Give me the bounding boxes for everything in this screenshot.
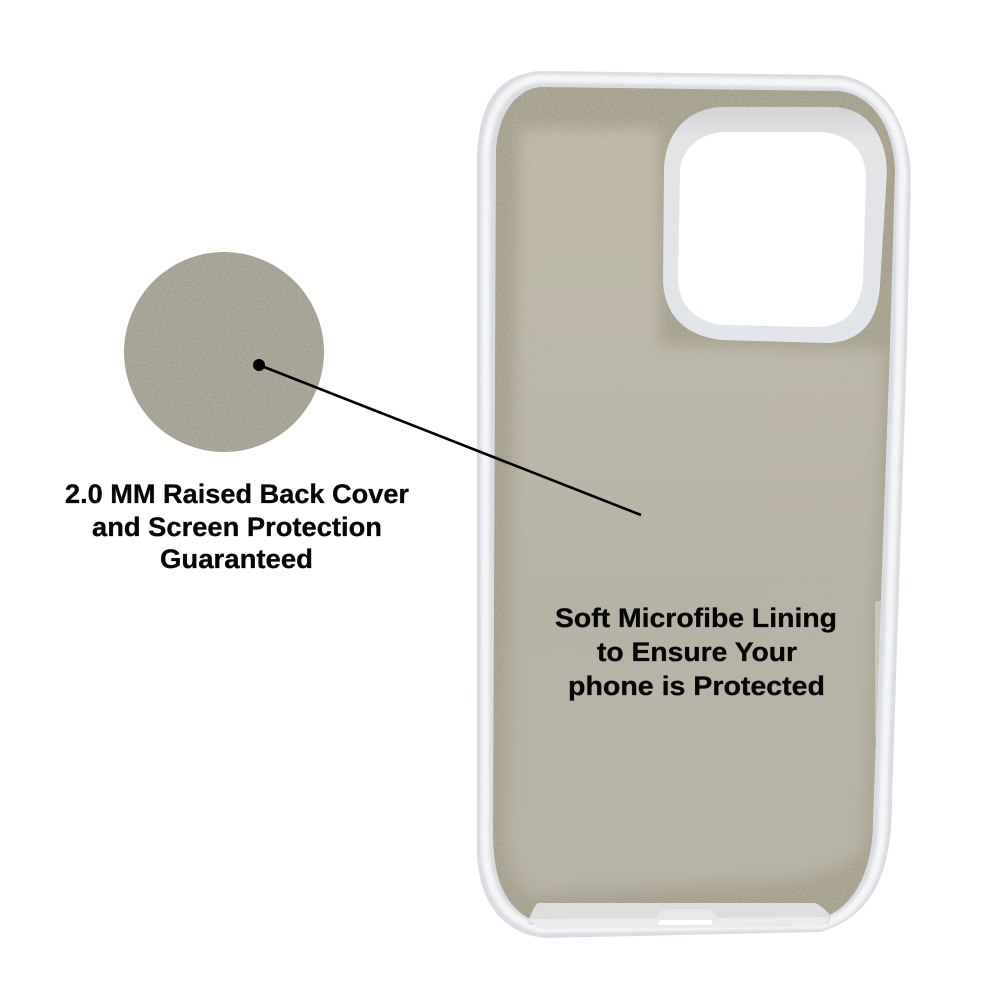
charging port [657, 909, 716, 925]
lining caption [555, 603, 837, 701]
microfibre lining [485, 80, 905, 925]
lining caption: phone is Protected [568, 671, 825, 701]
lining caption: to Ensure Your [597, 637, 798, 667]
bottom lip with charging port [528, 903, 831, 929]
lining caption: Soft Microfibe Lining [555, 603, 837, 633]
side button strip [875, 601, 881, 736]
left caption: Guaranteed [160, 544, 313, 574]
camera cutout ring [663, 107, 887, 343]
case white outer shell [477, 71, 911, 938]
left caption [65, 479, 409, 574]
callout pointer line and dot [253, 359, 641, 515]
left caption: 2.0 MM Raised Back Cover [65, 479, 409, 509]
phone case [477, 71, 911, 938]
left caption: and Screen Protection [92, 512, 382, 542]
bottom lip [528, 903, 831, 925]
camera cutout opening [678, 132, 866, 327]
texture swatch circle [124, 252, 324, 452]
